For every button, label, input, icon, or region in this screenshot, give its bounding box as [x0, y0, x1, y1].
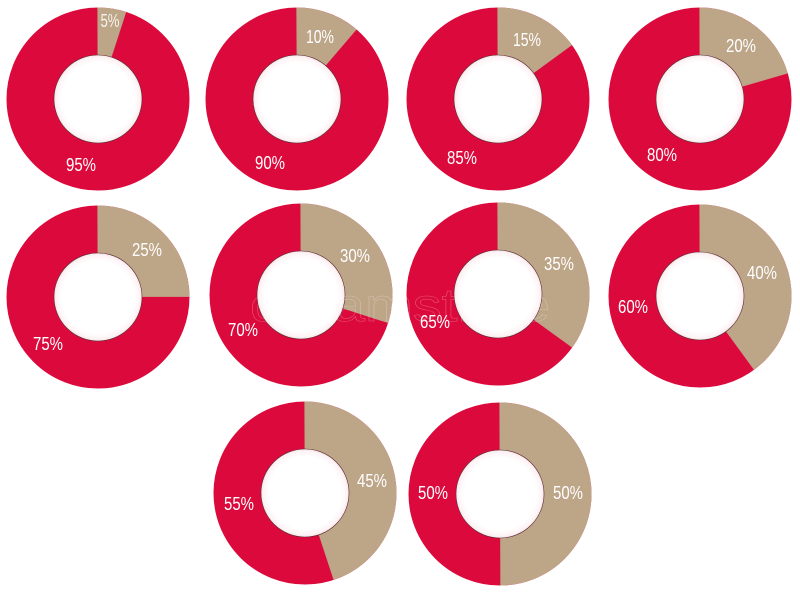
donut: 55% / 45%: 45% — [357, 471, 387, 491]
donut: 70% / 30%: 30% — [340, 246, 370, 266]
donut: 90% / 10%: 90% — [255, 153, 285, 173]
watermark: dreamstime — [250, 279, 550, 331]
donut: 90% / 10% — [229, 27, 365, 173]
donut: 80% / 20% — [632, 31, 768, 167]
donut: 95% / 5%: 95% — [66, 155, 96, 175]
donut: 85% / 15%: 85% — [447, 148, 477, 168]
donut: 75% / 25% — [30, 229, 166, 365]
donut: 70% / 30% — [228, 227, 370, 363]
donut: 60% / 40%: 60% — [618, 297, 648, 317]
donut: 50% / 50% — [418, 426, 583, 562]
donut: 75% / 25%: 25% — [132, 240, 162, 260]
donut: 70% / 30%: 70% — [228, 320, 258, 340]
donut: 60% / 40%: 40% — [747, 263, 777, 283]
donut: 50% / 50%: 50% — [553, 483, 583, 503]
donut: 65% / 35% — [420, 226, 574, 362]
donut: 80% / 20%: 20% — [726, 36, 756, 56]
donut: 95% / 5% — [30, 11, 166, 175]
donut: 65% / 35%: 65% — [420, 312, 450, 332]
donut: 55% / 45% — [224, 425, 387, 561]
donut: 85% / 15% — [430, 30, 566, 168]
donut: 80% / 20%: 80% — [647, 145, 677, 165]
donut: 50% / 50%: 50% — [418, 483, 448, 503]
donut: 90% / 10%: 10% — [306, 27, 334, 47]
donut: 55% / 45%: 55% — [224, 494, 254, 514]
donut: 65% / 35%: 35% — [544, 254, 574, 274]
donut: 75% / 25%: 75% — [33, 334, 63, 354]
donut: 85% / 15%: 15% — [513, 30, 541, 50]
donut: 60% / 40% — [618, 228, 777, 364]
donut: 95% / 5%: 5% — [100, 11, 120, 31]
